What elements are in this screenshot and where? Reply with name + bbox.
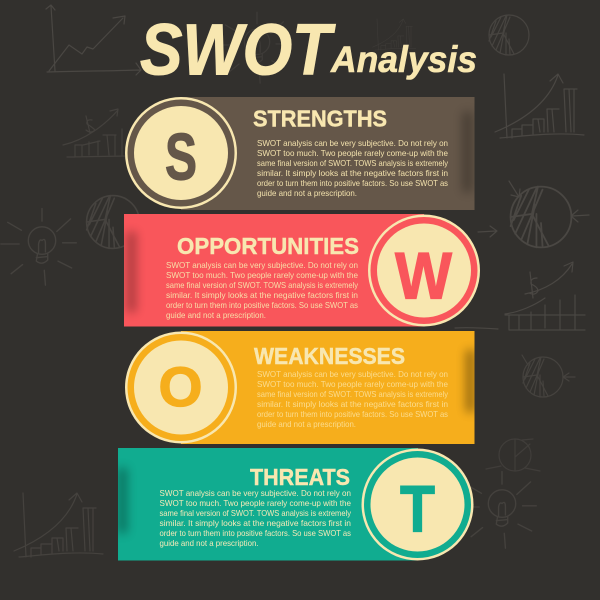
- panel: strengths: [125, 97, 474, 210]
- body threats: guide and not a prescription.: [160, 538, 258, 548]
- body strengths: similar. It simply looks at the negative factors first in: [257, 168, 448, 178]
- doodle: pie mid right: [509, 181, 589, 247]
- doodle: small circle chart: [486, 439, 540, 471]
- body weaknesses: guide and not a prescription.: [257, 419, 356, 429]
- body strengths: guide and not a prescription.: [257, 188, 357, 198]
- body threats: SWOT analysis can be very subjective. Do not rely on: [160, 488, 351, 498]
- badge W: [368, 214, 480, 326]
- banner shade weaknesses: [466, 350, 475, 412]
- title: [140, 10, 477, 90]
- body threats: similar. It simply looks at the negative factors first in: [160, 518, 351, 528]
- doodle: dollar bars right: [455, 262, 585, 330]
- body weaknesses: SWOT too much. Two people rarely come-up with the: [257, 379, 448, 389]
- badge O: O: [158, 355, 202, 418]
- title: Analysis: Analysis: [330, 39, 477, 80]
- banner strengths: [181, 97, 474, 210]
- badge W: W: [395, 238, 453, 312]
- doodle: bulb left: [1, 209, 76, 285]
- body weaknesses: [257, 369, 449, 429]
- badge S: S: [165, 120, 197, 194]
- body opportunities: guide and not a prescription.: [166, 310, 266, 320]
- heading threats: THREATS: [250, 464, 350, 490]
- doodle: bars bottom left: [14, 493, 103, 557]
- body opportunities: order to turn them into positive factors. So use SWOT as: [166, 300, 358, 310]
- badge O: [125, 332, 237, 444]
- badge T: [362, 448, 474, 560]
- body opportunities: SWOT analysis can be very subjective. Do not rely on: [166, 260, 358, 270]
- body weaknesses: SWOT analysis can be very subjective. Do not rely on: [257, 369, 448, 379]
- banner weaknesses: [181, 331, 474, 444]
- body weaknesses: order to turn them into positive factors. So use SWOT as: [257, 409, 448, 419]
- doodle: bulb lower right: [461, 472, 536, 548]
- body strengths: SWOT too much. Two people rarely come-up with the: [257, 148, 448, 158]
- body opportunities: SWOT too much. Two people rarely come-up with the: [166, 270, 358, 280]
- doodle: faint bars behind title: [373, 19, 416, 50]
- doodle: dollar bar chart left: [63, 109, 130, 157]
- doodle: pie top right: [489, 15, 529, 55]
- badge S: [125, 97, 237, 209]
- doodle: pie lower right: [522, 355, 575, 397]
- panel: weaknesses: [125, 331, 475, 444]
- heading weaknesses: WEAKNESSES: [254, 343, 405, 369]
- banner shade strengths: [463, 112, 472, 192]
- doodle: faint bulb behind title: [219, 12, 289, 83]
- panel: opportunities: [124, 214, 480, 326]
- body threats: order to turn them into positive factors. So use SWOT as: [160, 528, 351, 538]
- body opportunities: same final version of SWOT. TOWS analysis is extremely: [166, 280, 359, 290]
- body strengths: same final version of SWOT. TOWS analysis is extremely: [257, 158, 449, 168]
- doodle: pie left: [87, 196, 139, 248]
- body strengths: [257, 138, 449, 198]
- doodle: line chart top left: [46, 5, 141, 75]
- heading opportunities: OPPORTUNITIES: [177, 233, 359, 259]
- banner opportunities: [124, 214, 424, 326]
- badge T: T: [400, 472, 435, 546]
- banner threats: [118, 448, 418, 560]
- body threats: same final version of SWOT. TOWS analysis is extremely: [160, 508, 352, 518]
- body opportunities: [166, 260, 359, 320]
- doodle: bars right: [495, 74, 584, 138]
- doodle: arrow behind panels: [478, 226, 497, 237]
- banner shade threats: [118, 468, 127, 533]
- body threats: [160, 488, 352, 548]
- body weaknesses: same final version of SWOT. TOWS analysis is extremely: [257, 389, 449, 399]
- panel: threats: [118, 448, 474, 560]
- body threats: SWOT too much. Two people rarely come-up with the: [160, 498, 351, 508]
- body opportunities: similar. It simply looks at the negative factors first in: [166, 290, 358, 300]
- body weaknesses: similar. It simply looks at the negative factors first in: [257, 399, 448, 409]
- title: SWOT: SWOT: [140, 10, 336, 90]
- heading strengths: STRENGTHS: [253, 106, 387, 132]
- body strengths: order to turn them into positive factors. So use SWOT as: [257, 178, 448, 188]
- body strengths: SWOT analysis can be very subjective. Do not rely on: [257, 138, 448, 148]
- banner shade opportunities: [127, 232, 136, 312]
